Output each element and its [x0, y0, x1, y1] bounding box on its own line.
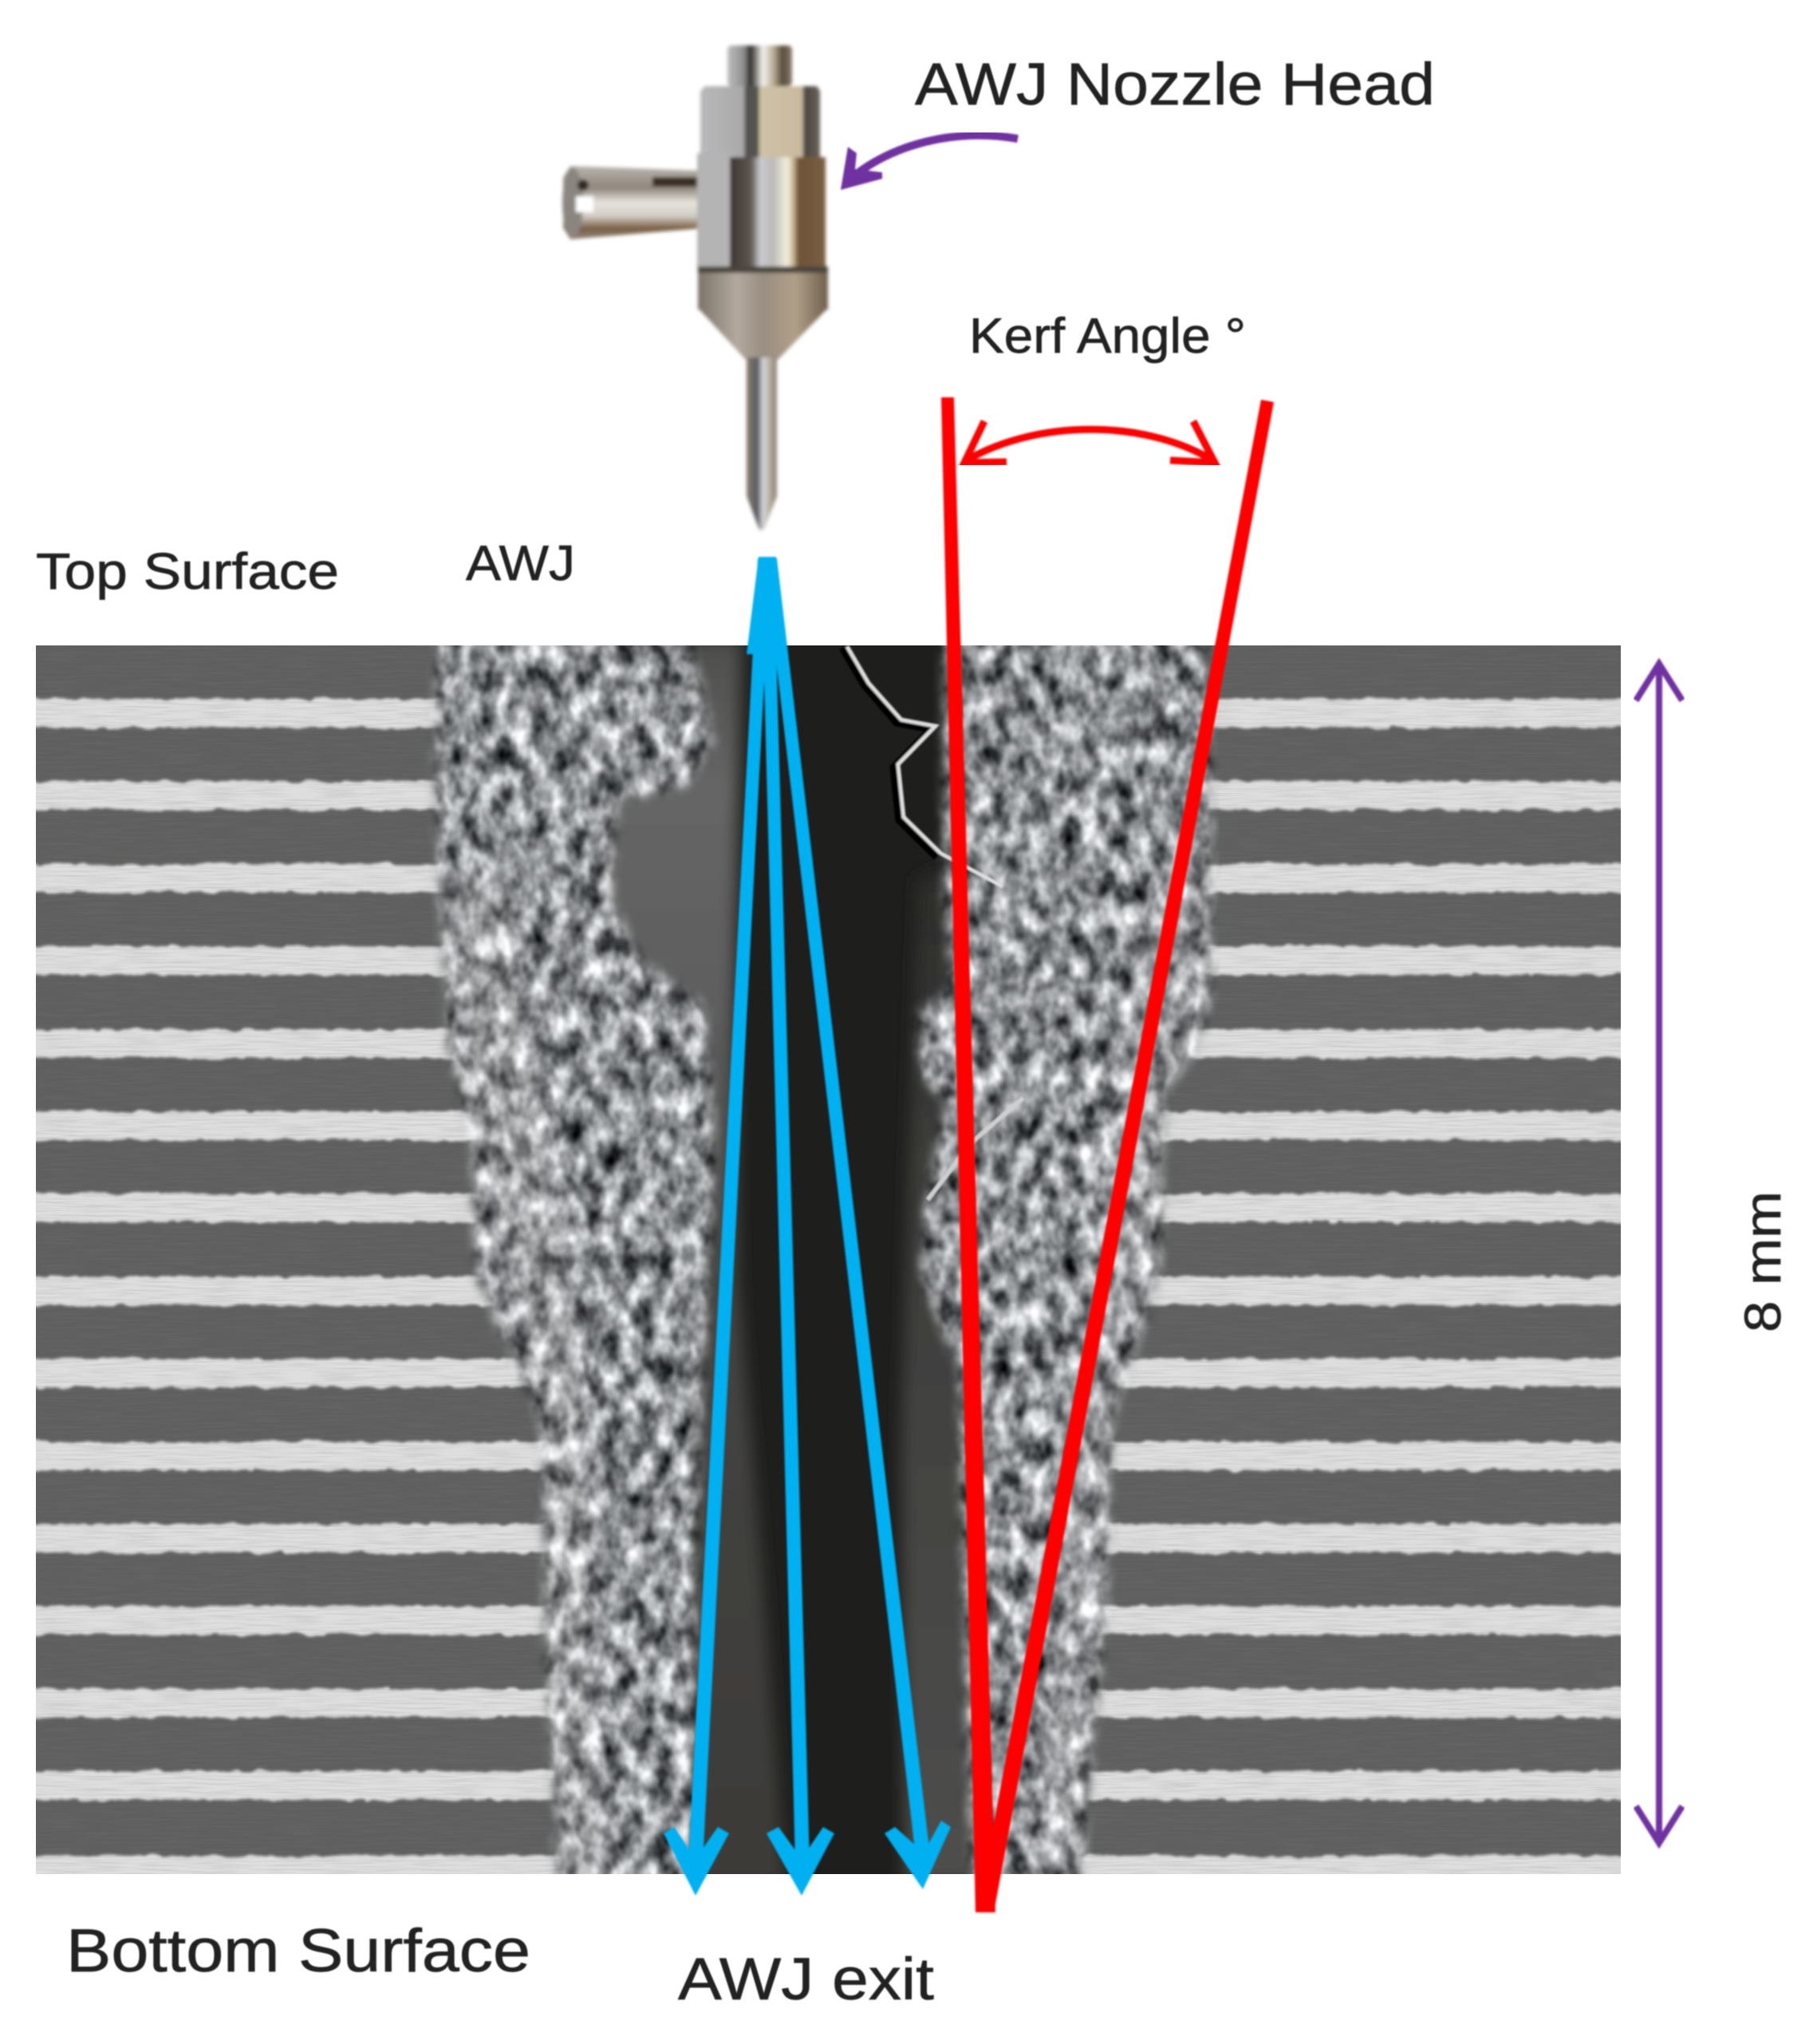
rough striated zone, left: [423, 630, 734, 1891]
arrow: nozzle head pointer: [841, 136, 1018, 190]
label: Top Surface: Top Surface: [36, 543, 339, 600]
arrow: kerf angle arc: [964, 421, 1215, 463]
label: AWJ exit: AWJ exit: [678, 1946, 934, 2012]
label: Bottom Surface: Bottom Surface: [66, 1917, 530, 1985]
nozzle upper hex body: [700, 86, 820, 158]
nozzle rear body: [697, 153, 734, 270]
smooth grey cut wall, right: [896, 871, 975, 1874]
white crack lines in channel: [842, 646, 1023, 1200]
jet stream left: [664, 558, 771, 1896]
nozzle mid cylinder: [730, 157, 826, 269]
icon: AWJ nozzle head: [562, 45, 828, 530]
left and right striped machined surface: [24, 634, 1639, 1891]
jet origin: [747, 557, 786, 654]
jet stream right: [764, 558, 951, 1889]
title: AWJ Nozzle Head: AWJ Nozzle Head: [915, 51, 1435, 117]
label: AWJ: AWJ: [466, 536, 575, 591]
label: Kerf Angle: Kerf Angle °: [969, 309, 1246, 364]
smooth grey cut wall, left: [590, 638, 786, 1883]
label: 8 mm depth: 8 mm: [1734, 1191, 1791, 1332]
dark central kerf channel: [696, 645, 973, 1874]
nozzle top cap: [727, 45, 792, 86]
nozzle cone: [698, 308, 828, 359]
kerf angle lines: [941, 397, 1274, 1912]
jet stream middle: [761, 558, 834, 1896]
arrow: 8 mm depth dimension: [1636, 664, 1682, 1843]
rough striated zone, right: [911, 645, 1219, 1874]
panel: micrograph of cut cross-section: [24, 630, 1639, 1891]
nozzle lower collar: [698, 266, 828, 310]
nozzle needle: [747, 357, 777, 530]
arrows: abrasive water jet streams: [664, 557, 951, 1896]
nozzle side arm: [562, 166, 722, 239]
